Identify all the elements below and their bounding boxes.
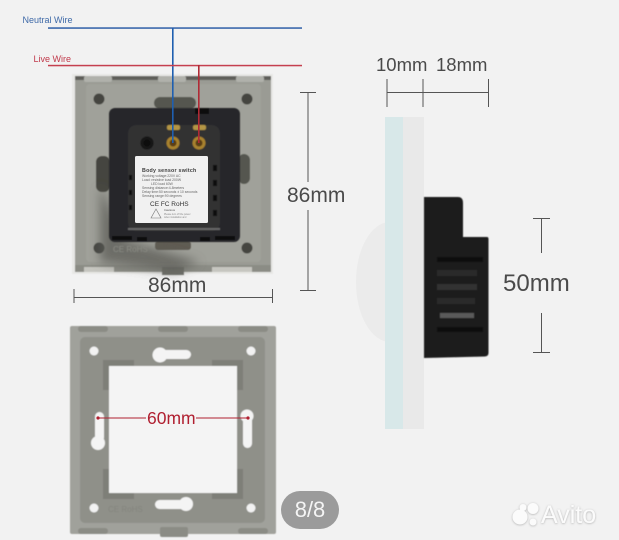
product label sticker: Sensing range:90 degrees [142,194,182,198]
shadow under module [100,185,200,272]
image counter badge: 8/8 [295,497,325,522]
product label sticker: Cautious [164,208,176,212]
dimension: 60mm hole spacing [96,408,250,428]
product label sticker: Sensing distance:4-8meters [142,186,184,190]
terminal labels: L [196,157,201,167]
product label sticker: when installation and [164,216,187,219]
sensor dome [356,222,424,342]
panel: side profile [356,117,488,429]
dimension: plate width 86mm [74,274,272,303]
dimension: plate width 86mm: 86mm [148,274,206,297]
image counter badge [281,491,339,529]
plate body [72,74,273,275]
watermark: Avito [512,501,596,529]
panel: switch rear view [72,74,273,275]
product label sticker: Please turn off the power [164,213,191,216]
product label sticker: Body sensor switch [142,168,197,174]
product label sticker: Load: resistive load 200W [142,178,182,182]
black module [109,108,240,242]
dimension: module 50mm [503,218,570,352]
dimension: module 50mm: 50mm [503,270,570,297]
glass panel [385,117,424,429]
neutral wire: Neutral Wire [22,15,73,25]
module profile [424,197,488,358]
product label sticker: Working voltage:220V AC [142,174,181,178]
product label sticker: Delay time:50 seconds ± 10 seconds [142,190,198,194]
watermark: Avito: Avito [541,501,596,529]
dimension: plate height 86mm [287,92,345,290]
dimension: depth 10mm and 18mm: 10mm [376,54,427,75]
panel: mounting frame [70,326,276,537]
dimension: 60mm hole spacing: 60mm [147,408,196,428]
terminal labels [168,157,201,167]
dimension: depth 10mm and 18mm: 18mm [436,54,487,75]
terminal labels: L1 [168,157,178,167]
dimension: depth 10mm and 18mm [376,54,488,107]
product label sticker: LED load 60W [151,182,174,186]
product label sticker: CE FC RoHS [150,201,189,208]
product label sticker [135,156,208,223]
plate body: CE RoHS [113,245,148,254]
live wire: Live Wire [34,54,71,64]
dimension: plate height 86mm: 86mm [287,184,345,207]
panel: mounting frame: CE RoHS [108,505,143,514]
